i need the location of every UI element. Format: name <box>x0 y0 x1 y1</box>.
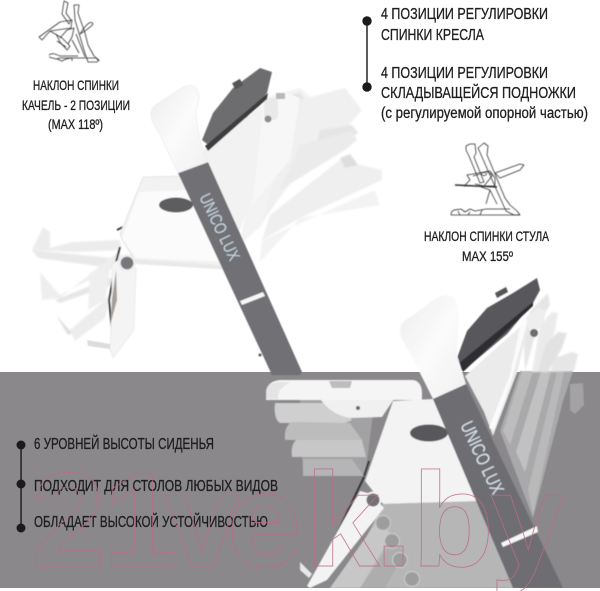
line icon: swing recline <box>39 1 99 62</box>
text: seat features: ПОДХОДИТ ДЛЯ СТОЛОВ ЛЮБЫХ ВИДОВ <box>34 478 278 495</box>
text: adjustment positions: 4 ПОЗИЦИИ РЕГУЛИРОВКИ <box>381 65 548 82</box>
text: adjustment positions: 4 ПОЗИЦИИ РЕГУЛИРОВКИ <box>381 6 548 23</box>
footrest cord <box>364 461 369 476</box>
headrest <box>457 278 540 371</box>
watermark: 21vek.by <box>31 446 565 591</box>
hinge clip <box>264 98 278 120</box>
ghost trays <box>300 399 375 476</box>
hinge <box>118 254 136 272</box>
text: adjustment positions: СПИНКИ КРЕСЛА <box>381 27 484 44</box>
white ring <box>501 526 538 547</box>
seat handle <box>159 198 193 212</box>
ghost hinges <box>376 516 420 586</box>
caption: swing recline: (MAX 118º) <box>48 116 103 132</box>
main back plate <box>465 318 530 436</box>
background grey band <box>0 372 600 588</box>
line icon: chair recline <box>451 143 524 215</box>
footrest strut <box>307 491 384 588</box>
text: seat features: 6 УРОВНЕЙ ВЫСОТЫ СИДЕНЬЯ <box>34 435 214 453</box>
seat <box>365 399 482 504</box>
tube label: UNICO LUX <box>455 418 508 498</box>
illustration: lower chair <box>266 278 584 588</box>
seat handle <box>410 424 448 442</box>
caption: chair recline: НАКЛОН СПИНКИ СТУЛА <box>424 229 549 244</box>
caption: swing recline: КАЧЕЛЬ - 2 ПОЗИЦИИ <box>22 97 130 113</box>
strip below band <box>0 588 600 591</box>
tube label: UNICO LUX <box>195 191 244 264</box>
tray underside <box>320 399 394 418</box>
seat <box>120 176 232 268</box>
main back plate <box>204 105 276 240</box>
top cap <box>151 85 208 173</box>
text: seat features: ОБЛАДАЕТ ВЫСОКОЙ УСТОЙЧИВОСТЬЮ <box>34 513 268 531</box>
text: adjustment positions <box>381 6 588 122</box>
caption: chair recline: MAX 155º <box>462 249 513 264</box>
ghost back positions <box>240 88 382 262</box>
footrest strut <box>110 258 136 358</box>
tray <box>266 380 422 400</box>
lower seat ghost <box>340 501 518 588</box>
ghost footrests <box>32 227 130 341</box>
white ring <box>240 292 265 305</box>
footrest cord <box>109 247 120 330</box>
caption: swing recline: НАКЛОН СПИНКИ <box>33 77 119 93</box>
ghost back positions <box>500 371 573 518</box>
top cap <box>400 295 466 399</box>
caption: chair recline <box>424 229 549 264</box>
bullets: lower left <box>16 440 26 532</box>
caption: swing recline <box>22 77 130 132</box>
headrest <box>202 68 272 144</box>
hinge <box>364 492 382 508</box>
tube <box>433 384 563 588</box>
tube <box>178 162 302 375</box>
text: seat features <box>34 435 278 531</box>
bullets: upper right <box>362 16 372 92</box>
illustration: upper chair <box>32 68 382 375</box>
